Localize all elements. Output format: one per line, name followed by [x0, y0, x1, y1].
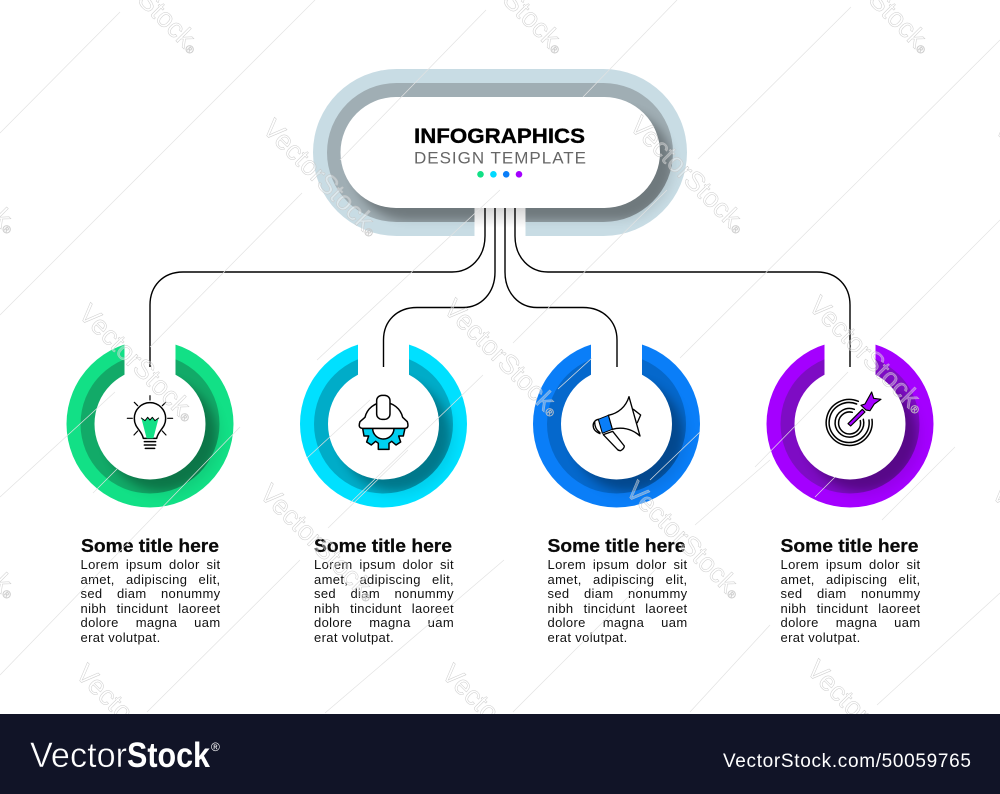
text block: step 3: Lorem ipsum dolor sit: [548, 557, 688, 572]
watermark overlay: VectorStock®: [70, 658, 199, 787]
text block: step 4: [780, 557, 920, 645]
icon: megaphone: [593, 397, 641, 451]
icon: helmet and gear: [359, 395, 408, 449]
text block: step 1: [80, 557, 220, 645]
ring: blue: [533, 338, 700, 508]
text block: step 3: [548, 557, 688, 645]
footer logo: Stock: [127, 736, 210, 775]
text block: step 3: nibh tincidunt laoreet: [548, 601, 688, 616]
four colour dots: [477, 171, 522, 178]
icon: target with arrow: [826, 392, 881, 445]
watermark overlay: VectorStock®: [73, 298, 202, 427]
text block: step 2: Lorem ipsum dolor sit: [314, 557, 454, 572]
footer logo: [30, 736, 220, 775]
icon: light bulb: [127, 396, 173, 448]
title: step 2: Some title here: [314, 536, 452, 556]
text block: step 4: nibh tincidunt laoreet: [780, 601, 920, 616]
footer bar: [0, 714, 1000, 794]
text block: step 2: sed diam nonummy: [314, 586, 454, 601]
text block: step 4: Lorem ipsum dolor sit: [780, 557, 920, 572]
subheading: DESIGN TEMPLATE: DESIGN TEMPLATE: [414, 148, 586, 168]
watermark overlay: VectorStock®: [624, 110, 753, 239]
watermark overlay: VectorStock®: [254, 478, 383, 607]
text block: step 4: amet, adipiscing elit,: [780, 572, 920, 587]
text block: step 3: amet, adipiscing elit,: [548, 572, 688, 587]
text block: step 1: sed diam nonummy: [80, 586, 220, 601]
text block: step 2: nibh tincidunt laoreet: [314, 601, 454, 616]
text block: step 1: nibh tincidunt laoreet: [80, 601, 220, 616]
text block: step 1: erat volutpat.: [80, 630, 161, 645]
text block: step 2: [314, 557, 454, 645]
watermark overlay: VectorStock®: [803, 290, 932, 419]
watermark overlay: VectorStock®: [620, 475, 749, 604]
text block: step 4: dolore magna uam: [780, 615, 920, 630]
connector lines: [150, 208, 850, 367]
title: step 1: Some title here: [81, 536, 219, 556]
heading: INFOGRAPHICS: INFOGRAPHICS: [414, 125, 585, 148]
text block: step 1: dolore magna uam: [80, 615, 220, 630]
text block: step 1: Lorem ipsum dolor sit: [80, 557, 220, 572]
watermark overlay: VectorStock®: [257, 113, 386, 242]
footer logo: Vector: [30, 736, 127, 775]
text block: step 3: erat volutpat.: [548, 630, 628, 645]
text block: step 4: erat volutpat.: [780, 630, 861, 645]
watermark overlay: VectorStock®: [436, 658, 565, 787]
ring: cyan: [300, 338, 467, 508]
text block: step 1: amet, adipiscing elit,: [80, 572, 220, 587]
ring: green: [66, 338, 234, 508]
title: step 4: Some title here: [780, 536, 918, 556]
watermark overlay: VectorStock®: [438, 293, 567, 422]
text block: step 3: sed diam nonummy: [548, 586, 688, 601]
title: step 3: Some title here: [548, 536, 686, 556]
text block: step 2: amet, adipiscing elit,: [314, 572, 454, 587]
footer image id: VectorStock.com/50059765: [723, 751, 971, 772]
panel: central title pill: [313, 69, 687, 238]
footer logo: ®: [211, 740, 220, 754]
text block: step 2: dolore magna uam: [314, 615, 454, 630]
ring: purple: [766, 338, 934, 508]
text block: step 4: sed diam nonummy: [780, 586, 920, 601]
text block: step 3: dolore magna uam: [548, 615, 688, 630]
watermark overlay: VectorStock®: [801, 654, 930, 783]
text block: step 2: erat volutpat.: [314, 630, 394, 645]
